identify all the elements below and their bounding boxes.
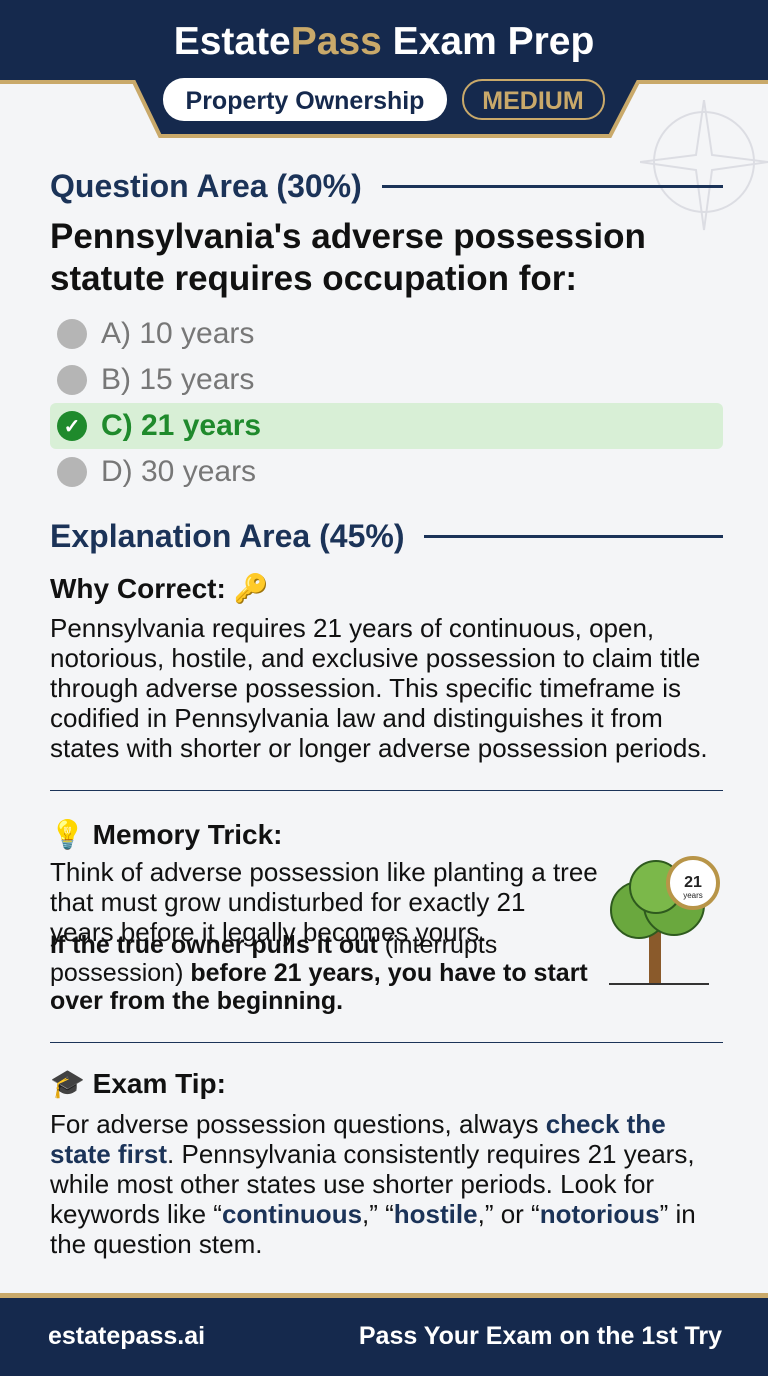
memory trick: If the true owner pulls it out (interrupts [50, 931, 497, 959]
topic pill [163, 78, 447, 121]
memory trick: years before it legally becomes yours. [50, 917, 486, 947]
heading: question area: Question Area (30%) [50, 168, 362, 204]
exam tip: while most other states use shorter periods. Look for [50, 1169, 654, 1199]
why correct: Pennsylvania requires 21 years of continuous, open, [50, 613, 654, 643]
footer [0, 1293, 768, 1376]
memory trick: 💡 Memory Trick: [50, 819, 283, 850]
heading: question area [50, 168, 723, 204]
exam tip: For adverse possession questions, always check the [50, 1109, 666, 1139]
why correct: notorious, hostile, and exclusive possession to claim title [50, 643, 700, 673]
options: D) 30 years [101, 455, 256, 488]
options: B) 15 years [101, 363, 254, 396]
exam tip [50, 1068, 696, 1259]
why correct: states with shorter or longer adverse possession periods. [50, 733, 708, 763]
heading: explanation area [50, 518, 723, 554]
question text [50, 217, 646, 298]
header [0, 0, 768, 138]
icon: tree with clock [609, 856, 720, 985]
difficulty pill: MEDIUM [482, 87, 584, 115]
icon: tree with clock: 21 [684, 874, 702, 891]
options: A) 10 years [101, 317, 254, 350]
why correct [50, 573, 708, 763]
why correct: through adverse possession. This specific timeframe is [50, 673, 681, 703]
memory trick: that must grow undisturbed for exactly 21 [50, 887, 525, 917]
question text: Pennsylvania's adverse possession [50, 217, 646, 256]
options: ✓ [64, 416, 80, 438]
memory trick: over from the beginning. [50, 987, 343, 1015]
exam tip: state first. Pennsylvania consistently requires 21 years, [50, 1139, 695, 1169]
difficulty pill [463, 80, 604, 119]
question text: statute requires occupation for: [50, 259, 577, 298]
footer url: estatepass.ai [48, 1322, 205, 1350]
footer tagline: Pass Your Exam on the 1st Try [359, 1322, 722, 1350]
why correct: codified in Pennsylvania law and distinguishes it from [50, 703, 663, 733]
icon: tree with clock: years [683, 891, 703, 900]
topic pill: Property Ownership [186, 87, 424, 115]
options [50, 317, 723, 488]
memory trick: possession) before 21 years, you have to start [50, 959, 588, 987]
memory trick [50, 819, 598, 1015]
exam tip: 🎓 Exam Tip: [50, 1068, 226, 1099]
heading: explanation area: Explanation Area (45%) [50, 518, 404, 554]
memory trick: Think of adverse possession like planting a tree [50, 857, 598, 887]
title: EstatePass Exam Prep [174, 20, 594, 63]
options: C) 21 years [101, 409, 261, 442]
why correct: Why Correct: 🔑 [50, 573, 268, 604]
exam tip: keywords like “continuous,” “hostile,” or “notorious” in [50, 1199, 696, 1229]
exam tip: the question stem. [50, 1229, 262, 1259]
icon: compass rose [640, 100, 768, 230]
